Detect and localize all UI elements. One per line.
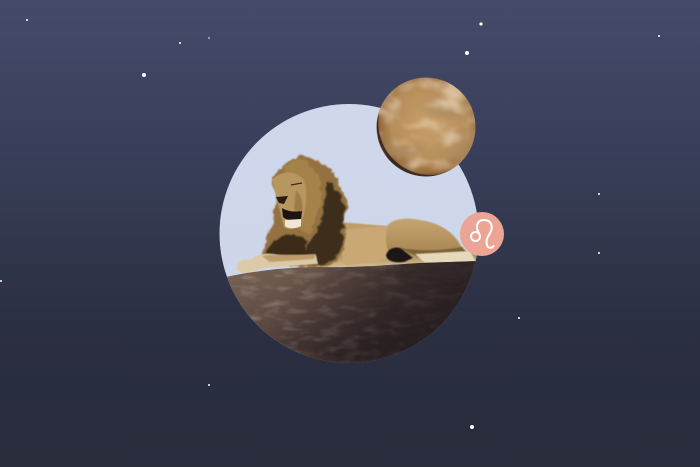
mane — [262, 155, 348, 267]
planet: Venus — [376, 77, 476, 177]
rear paw — [386, 248, 413, 262]
rock — [227, 261, 476, 363]
chin — [285, 219, 301, 228]
mouth — [282, 208, 302, 221]
icon: Leo glyph — [471, 220, 494, 248]
badge: Leo zodiac symbol — [460, 212, 504, 256]
photo disc: lion on rock — [215, 100, 485, 370]
lion body — [300, 219, 478, 268]
front legs — [237, 254, 318, 274]
face — [272, 172, 306, 229]
sky — [215, 100, 485, 370]
nose — [276, 196, 288, 204]
lion — [237, 155, 478, 274]
eye — [291, 183, 302, 185]
